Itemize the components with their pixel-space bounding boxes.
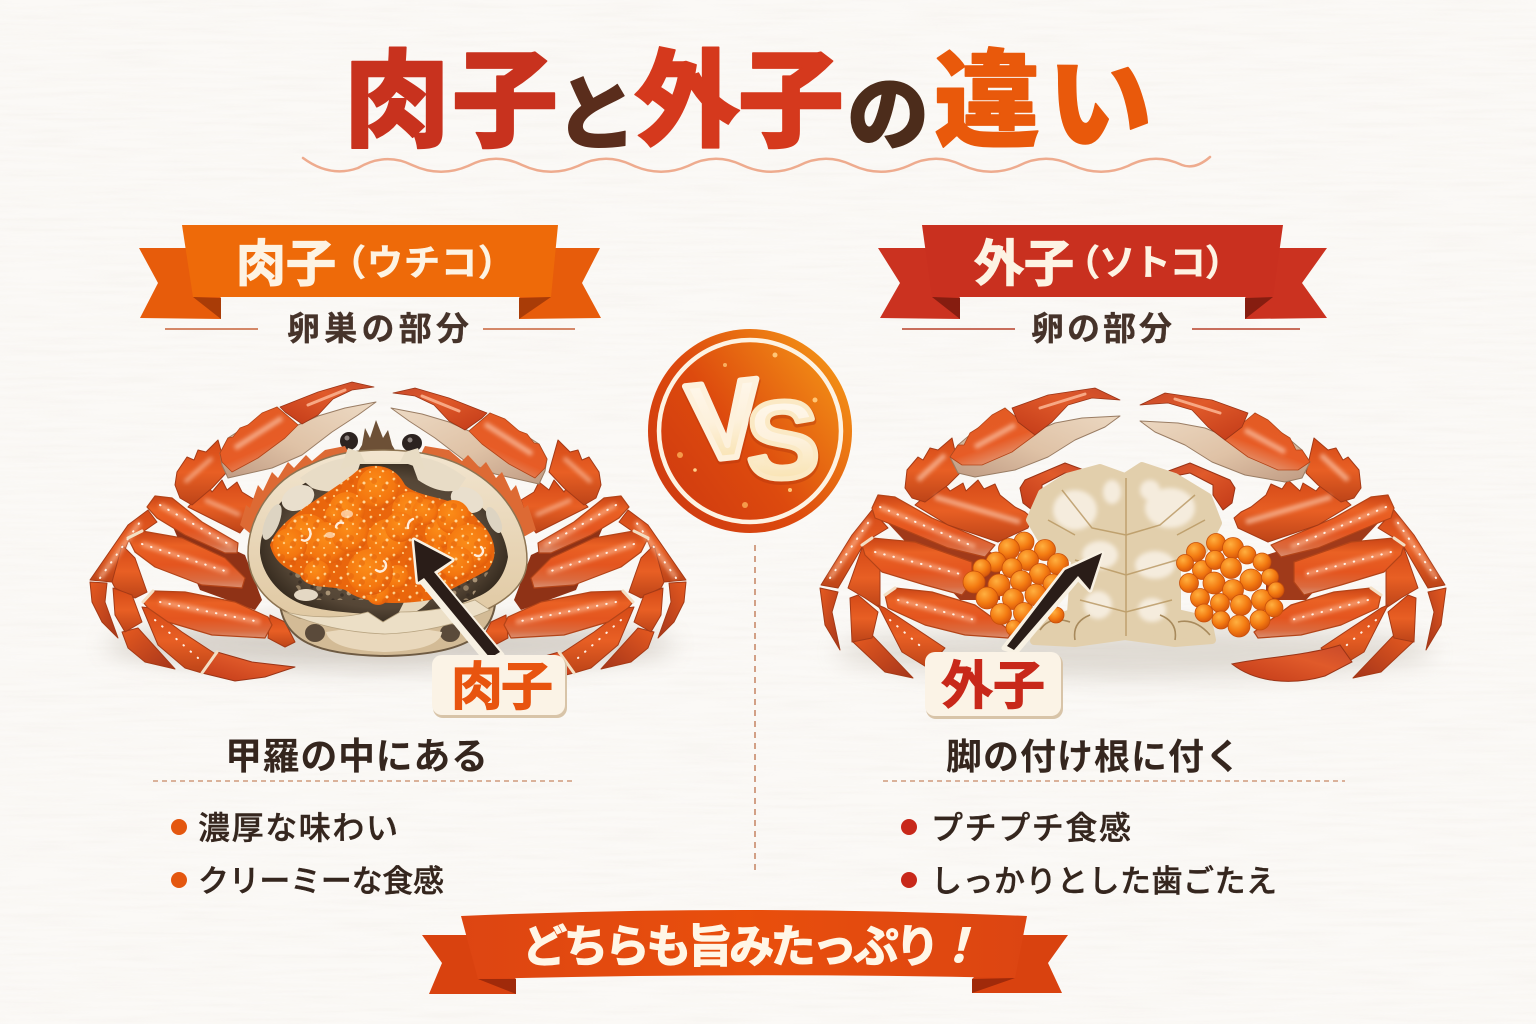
legs right side	[481, 440, 686, 681]
title	[344, 43, 1152, 164]
VS letters: V	[682, 356, 768, 486]
title: い	[1048, 48, 1152, 164]
arrow: 肉子 pointer	[414, 540, 502, 662]
legs left side	[820, 438, 1032, 678]
callout: 外子	[925, 652, 1063, 719]
body plate	[1030, 466, 1218, 643]
shell rim	[248, 448, 527, 634]
eyes and rostrum	[340, 420, 422, 465]
ribbon heading 肉子: 肉子	[236, 236, 336, 292]
underside plate	[280, 605, 495, 656]
ribbon text: どちらも旨みたっぷり	[522, 921, 940, 972]
callout: 肉子: 肉子	[451, 659, 553, 717]
shadow	[105, 621, 675, 669]
title: と	[555, 70, 637, 161]
bullet item 1: 濃厚な味わい	[198, 810, 398, 846]
callout: 肉子	[432, 655, 567, 718]
left claw	[220, 382, 376, 478]
small front arm left	[1020, 463, 1092, 510]
bullet item 1: プチプチ食感	[931, 810, 1131, 846]
ribbon heading reading: （ウチコ）	[330, 242, 514, 283]
right claw	[391, 388, 547, 484]
eggs left cluster	[963, 532, 1068, 636]
legs right side	[1234, 438, 1446, 678]
title: 肉子	[344, 43, 558, 161]
title: 外子	[634, 43, 844, 161]
VS letters: S	[744, 380, 822, 505]
lower right dactyl	[1232, 645, 1352, 681]
callout: 外子: 外子	[941, 658, 1045, 716]
list: right features	[901, 810, 1277, 899]
left claw	[950, 388, 1120, 477]
small front arm right	[1163, 463, 1235, 510]
bullet item 2: クリーミーな食感	[198, 864, 444, 899]
crab: left, open shell with 内 roe	[90, 382, 686, 681]
right claw	[1140, 393, 1310, 482]
panel: left ribbon 肉子	[139, 225, 601, 319]
text block: right location: 脚の付け根に付く	[946, 736, 1241, 777]
bottom ribbon	[422, 910, 1068, 994]
title: の	[847, 70, 929, 161]
ribbon exclamation: ！	[935, 920, 981, 972]
shell shoulders with spikes	[240, 446, 536, 540]
crab: right, underside with 外子 eggs	[820, 388, 1446, 681]
roe	[270, 466, 495, 605]
legs left side	[90, 440, 295, 681]
VS letters: V	[682, 358, 768, 488]
subheading: 卵巣の部分: 卵巣の部分	[287, 310, 469, 347]
shadow	[835, 626, 1435, 678]
arrow: 外子 pointer	[1004, 553, 1102, 652]
VS badge	[648, 329, 852, 533]
text block: left location: 甲羅の中にある	[225, 736, 488, 777]
subheading: 卵の部分: 卵の部分	[1031, 310, 1172, 347]
wave underline	[303, 157, 1210, 172]
panel: right ribbon 外子	[878, 225, 1327, 319]
ribbon heading 外子: 外子	[974, 236, 1074, 292]
list: left features	[171, 810, 444, 899]
title: 違	[934, 43, 1040, 161]
eggs right cluster	[1176, 534, 1284, 637]
ribbon heading reading: （ソトコ）	[1064, 242, 1241, 283]
VS letters: S	[744, 378, 822, 503]
VS letters	[682, 356, 822, 505]
center dashed divider	[754, 545, 756, 870]
bullet item 2: しっかりとした歯ごたえ	[931, 864, 1277, 899]
